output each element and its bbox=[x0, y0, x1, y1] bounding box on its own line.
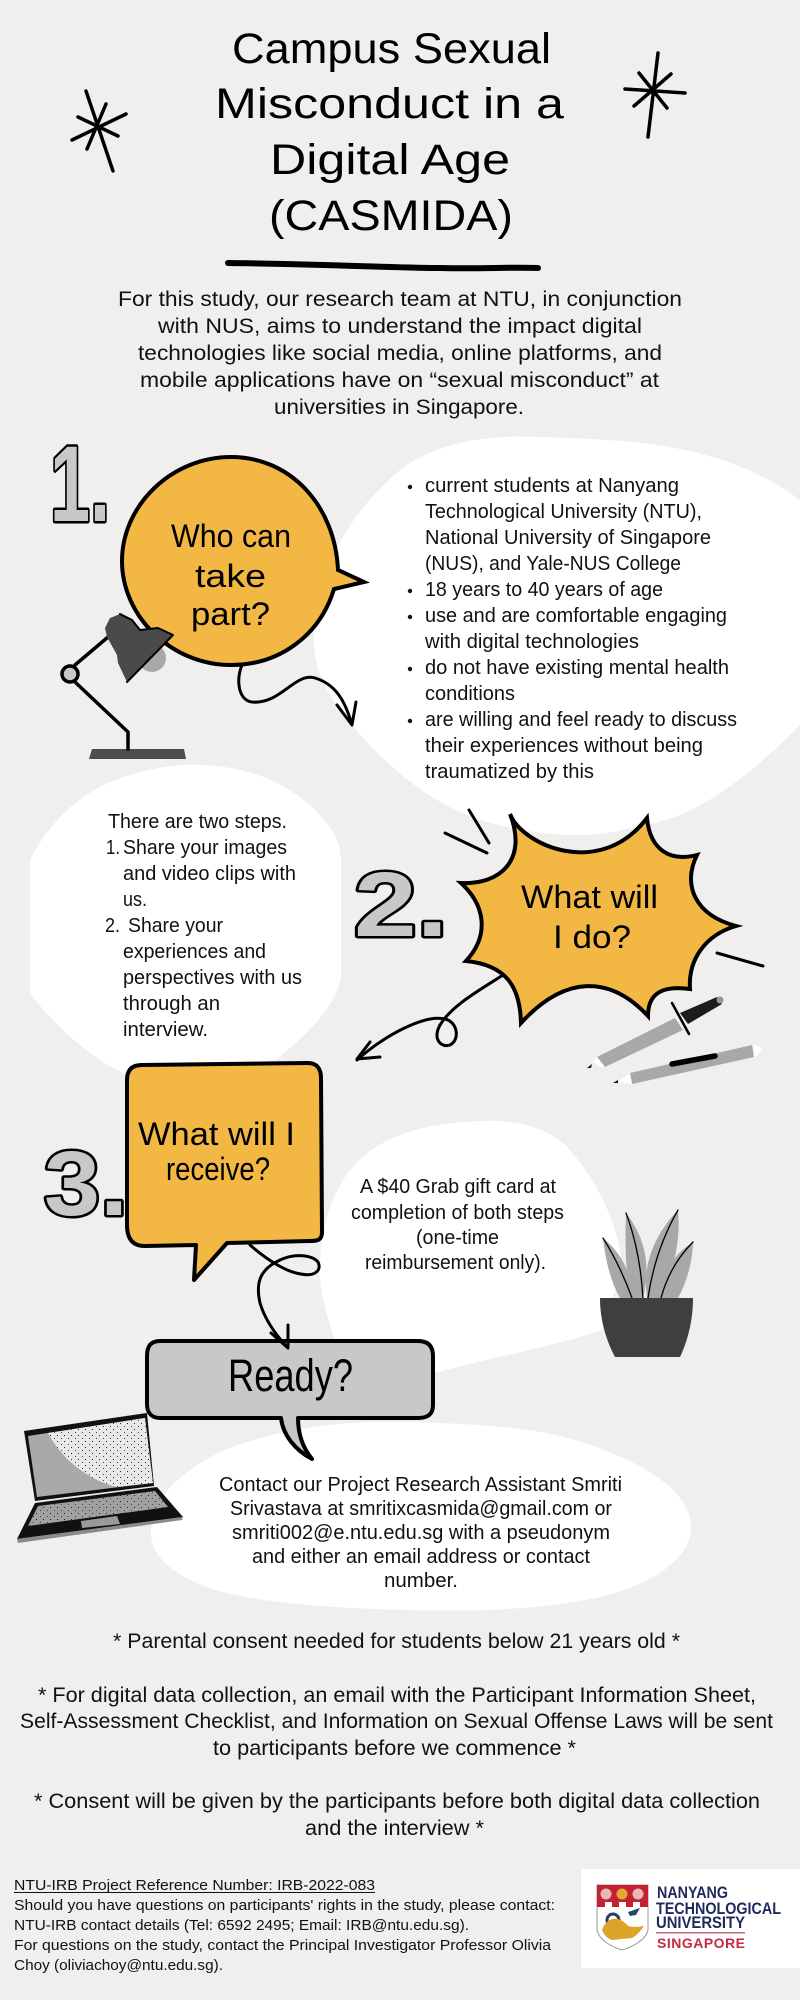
eligibility bullet list: current students at Nanyang bbox=[425, 475, 679, 497]
icon: potted plant bbox=[600, 1210, 693, 1357]
intro text: For this study, our research team at NTU, in conjunction bbox=[118, 288, 682, 311]
consent notes: * Parental consent needed for students below 21 years old * bbox=[113, 1630, 680, 1653]
eligibility bullet list: do not have existing mental health bbox=[425, 657, 729, 679]
icon: left star doodle bbox=[72, 91, 126, 171]
title: Digital Age bbox=[270, 136, 510, 184]
two steps text: perspectives with us bbox=[123, 967, 302, 989]
eligibility bullet list: 18 years to 40 years of age bbox=[425, 579, 663, 601]
eligibility bullet list: National University of Singapore bbox=[425, 527, 711, 549]
speech box: what will I receive: What will I bbox=[138, 1116, 295, 1152]
eligibility bullet list: use and are comfortable engaging bbox=[425, 605, 727, 627]
arrow: to ready bbox=[250, 1245, 319, 1348]
footer contact details: For questions on the study, contact the Principal Investigator Professor Olivia bbox=[14, 1937, 552, 1954]
panel: reward blob bbox=[320, 1121, 622, 1372]
speech box: ready: Ready? bbox=[228, 1350, 353, 1401]
intro text bbox=[118, 288, 682, 419]
footer contact details bbox=[14, 1877, 555, 1974]
two steps text: There are two steps. bbox=[108, 811, 287, 833]
title underline bbox=[228, 263, 538, 268]
reward text bbox=[351, 1176, 564, 1274]
contact text bbox=[219, 1474, 622, 1592]
consent notes: and the interview * bbox=[305, 1817, 484, 1840]
footer contact details: Choy (oliviachoy@ntu.edu.sg). bbox=[14, 1957, 223, 1974]
eligibility bullet list: their experiences without being bbox=[425, 735, 703, 757]
panel: two steps blob bbox=[30, 765, 341, 1075]
contact text: Srivastava at smritixcasmida@gmail.com or bbox=[230, 1498, 612, 1520]
title: Campus Sexual bbox=[232, 25, 551, 73]
logo: Nanyang Technological University: TECHNOLOGICAL bbox=[656, 1899, 781, 1918]
reward text: A $40 Grab gift card at bbox=[360, 1176, 556, 1198]
speech box: what will I receive bbox=[127, 1063, 322, 1280]
two steps text: and video clips with bbox=[123, 863, 296, 885]
panel: who can take part answer blob bbox=[314, 437, 800, 835]
speech bubble: who can take part: Who can bbox=[171, 518, 291, 554]
number 1: 1. bbox=[50, 423, 110, 544]
speech bubble: who can take part: part? bbox=[191, 596, 270, 632]
logo: Nanyang Technological University: NANYANG bbox=[657, 1883, 728, 1902]
footer contact details: NTU-IRB Project Reference Number: IRB-2022-083 bbox=[14, 1877, 375, 1894]
icon: desk lamp bbox=[62, 614, 186, 759]
title: Misconduct in a bbox=[215, 80, 564, 128]
footer contact details: NTU-IRB contact details (Tel: 6592 2495; Email: IRB@ntu.edu.sg). bbox=[14, 1917, 469, 1934]
two steps text: experiences and bbox=[123, 941, 266, 963]
consent notes: to participants before we commence * bbox=[213, 1737, 576, 1760]
reward text: (one-time bbox=[416, 1227, 499, 1249]
eligibility bullet list bbox=[408, 475, 737, 783]
eligibility bullet list: are willing and feel ready to discuss bbox=[425, 709, 737, 731]
two steps text: interview. bbox=[123, 1019, 208, 1041]
icon: laptop bbox=[17, 1413, 183, 1543]
contact text: Contact our Project Research Assistant Smriti bbox=[219, 1474, 622, 1496]
logo shield bbox=[597, 1885, 648, 1950]
eligibility bullet list: (NUS), and Yale-NUS College bbox=[425, 553, 681, 575]
intro text: mobile applications have on “sexual misconduct” at bbox=[140, 369, 659, 392]
consent notes bbox=[20, 1630, 773, 1840]
consent notes: Self-Assessment Checklist, and Information on Sexual Offense Laws will be sent bbox=[20, 1710, 773, 1733]
starburst: what will I do: What will bbox=[521, 879, 658, 915]
speech bubble: who can take part: take bbox=[195, 558, 266, 594]
reward text: reimbursement only). bbox=[365, 1252, 546, 1274]
eligibility bullet list: conditions bbox=[425, 683, 515, 705]
arrow: to eligibility list bbox=[239, 665, 356, 725]
number 3: 3. bbox=[44, 1133, 128, 1235]
panel: contact blob bbox=[151, 1422, 691, 1611]
intro text: with NUS, aims to understand the impact digital bbox=[157, 315, 642, 338]
reward text: completion of both steps bbox=[351, 1202, 564, 1224]
eligibility bullet list: with digital technologies bbox=[424, 631, 639, 653]
consent notes: * Consent will be given by the participants before both digital data collection bbox=[34, 1790, 760, 1813]
icon: right star doodle bbox=[625, 53, 685, 137]
intro text: technologies like social media, online platforms, and bbox=[138, 342, 662, 365]
intro text: universities in Singapore. bbox=[274, 396, 524, 419]
speech box: what will I receive: receive? bbox=[166, 1151, 270, 1187]
two steps text: us. bbox=[123, 889, 147, 911]
starburst: what will I do bbox=[461, 814, 736, 1023]
two steps text: 1. bbox=[106, 837, 120, 859]
two steps text: through an bbox=[123, 993, 220, 1015]
contact text: number. bbox=[384, 1570, 458, 1592]
logo: Nanyang Technological University: SINGAPORE bbox=[657, 1935, 745, 1951]
speech bubble: who can take part bbox=[122, 457, 364, 665]
speech box: ready bbox=[147, 1341, 433, 1459]
arrow: to steps bbox=[357, 975, 503, 1060]
title bbox=[215, 25, 564, 240]
icon: pens bbox=[587, 996, 762, 1084]
contact text: and either an email address or contact bbox=[252, 1546, 590, 1568]
two steps text bbox=[105, 811, 302, 1041]
contact text: smriti002@e.ntu.edu.sg with a pseudonym bbox=[232, 1522, 610, 1544]
number 2: 2. bbox=[354, 854, 448, 956]
two steps text: Share your images bbox=[123, 837, 287, 859]
starburst: what will I do: I do? bbox=[553, 919, 631, 955]
eligibility bullet list: Technological University (NTU), bbox=[425, 501, 702, 523]
eligibility bullet list: traumatized by this bbox=[425, 761, 594, 783]
burst accent dashes bbox=[445, 810, 763, 966]
logo: Nanyang Technological University: UNIVERSITY bbox=[656, 1913, 746, 1932]
two steps text: 2. bbox=[105, 915, 120, 937]
logo: Nanyang Technological University bbox=[581, 1869, 800, 1968]
two steps text: Share your bbox=[128, 915, 223, 937]
footer contact details: Should you have questions on participants' rights in the study, please contact: bbox=[14, 1897, 555, 1914]
title: (CASMIDA) bbox=[269, 192, 513, 240]
consent notes: * For digital data collection, an email with the Participant Information Sheet, bbox=[38, 1684, 756, 1707]
